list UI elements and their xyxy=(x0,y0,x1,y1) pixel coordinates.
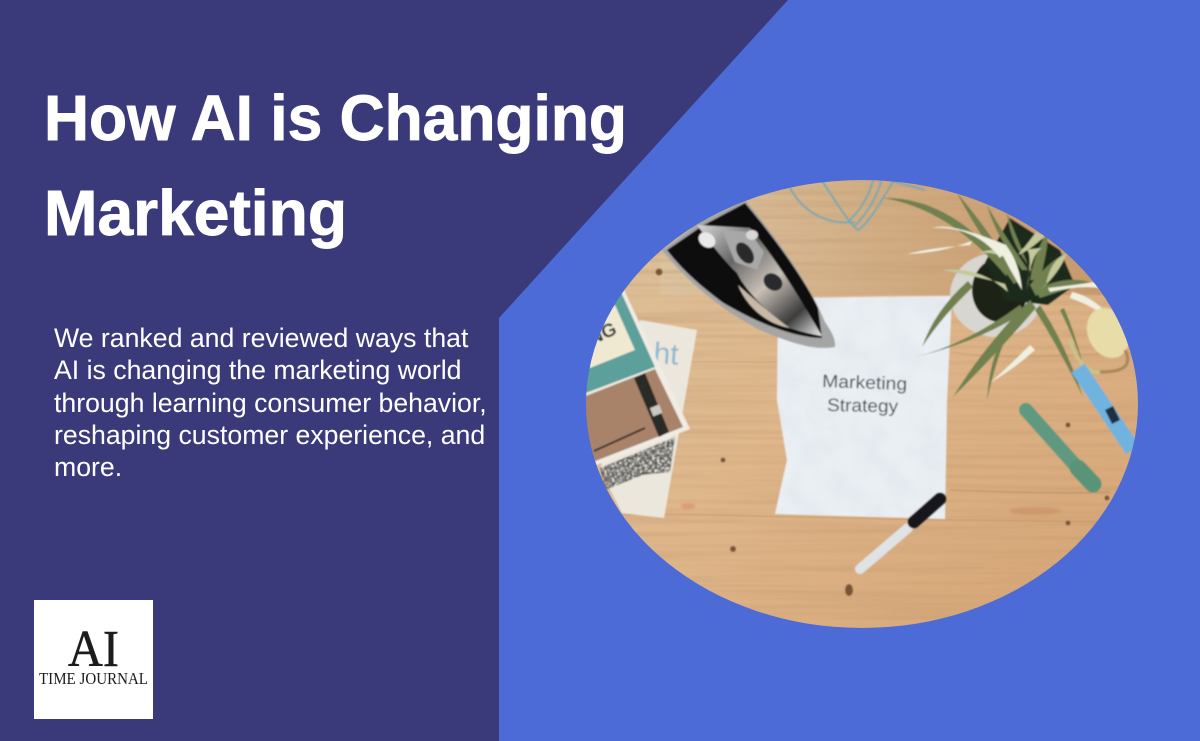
paper text: Marketing Strategy xyxy=(822,371,908,416)
paper text: Marketing Strategy: Strategy xyxy=(827,395,898,416)
description text: AI is changing the marketing world xyxy=(54,355,461,385)
back book: white cover with blue letters xyxy=(598,320,697,518)
description text: We ranked and reviewed ways that xyxy=(54,323,469,353)
measuring tape roll xyxy=(1068,308,1130,374)
front book: teal and brown cover: NG xyxy=(585,319,620,350)
green marker xyxy=(1026,410,1093,484)
plant in woven pot xyxy=(884,194,1102,399)
ribbon xyxy=(790,178,925,230)
logo: AI Time Journal xyxy=(34,600,153,719)
description text: more. xyxy=(54,452,122,482)
wood knots xyxy=(656,268,1110,596)
back book: white cover with blue letters: ht xyxy=(653,337,680,372)
title: How AI is Changing xyxy=(44,82,627,154)
title: Marketing xyxy=(44,177,347,249)
paper text: Marketing Strategy: Marketing xyxy=(822,371,908,394)
description text xyxy=(54,323,487,482)
black marker pen xyxy=(860,499,940,569)
crumpled paper with title xyxy=(774,295,952,520)
description text: reshaping customer experience, and xyxy=(54,420,485,450)
wood desk surface xyxy=(596,180,1138,628)
logo: AI Time Journal: AI xyxy=(68,621,119,678)
logo: AI Time Journal: TIME JOURNAL xyxy=(39,669,148,688)
description text: through learning consumer behavior, xyxy=(54,388,487,418)
title xyxy=(44,82,627,249)
background: blue angled panel xyxy=(499,0,1200,741)
blue highlighter xyxy=(1078,368,1133,450)
front book: teal and brown cover xyxy=(575,288,690,466)
clothes iron xyxy=(662,200,835,348)
photo: marketing strategy desk in oval frame xyxy=(575,170,1150,640)
